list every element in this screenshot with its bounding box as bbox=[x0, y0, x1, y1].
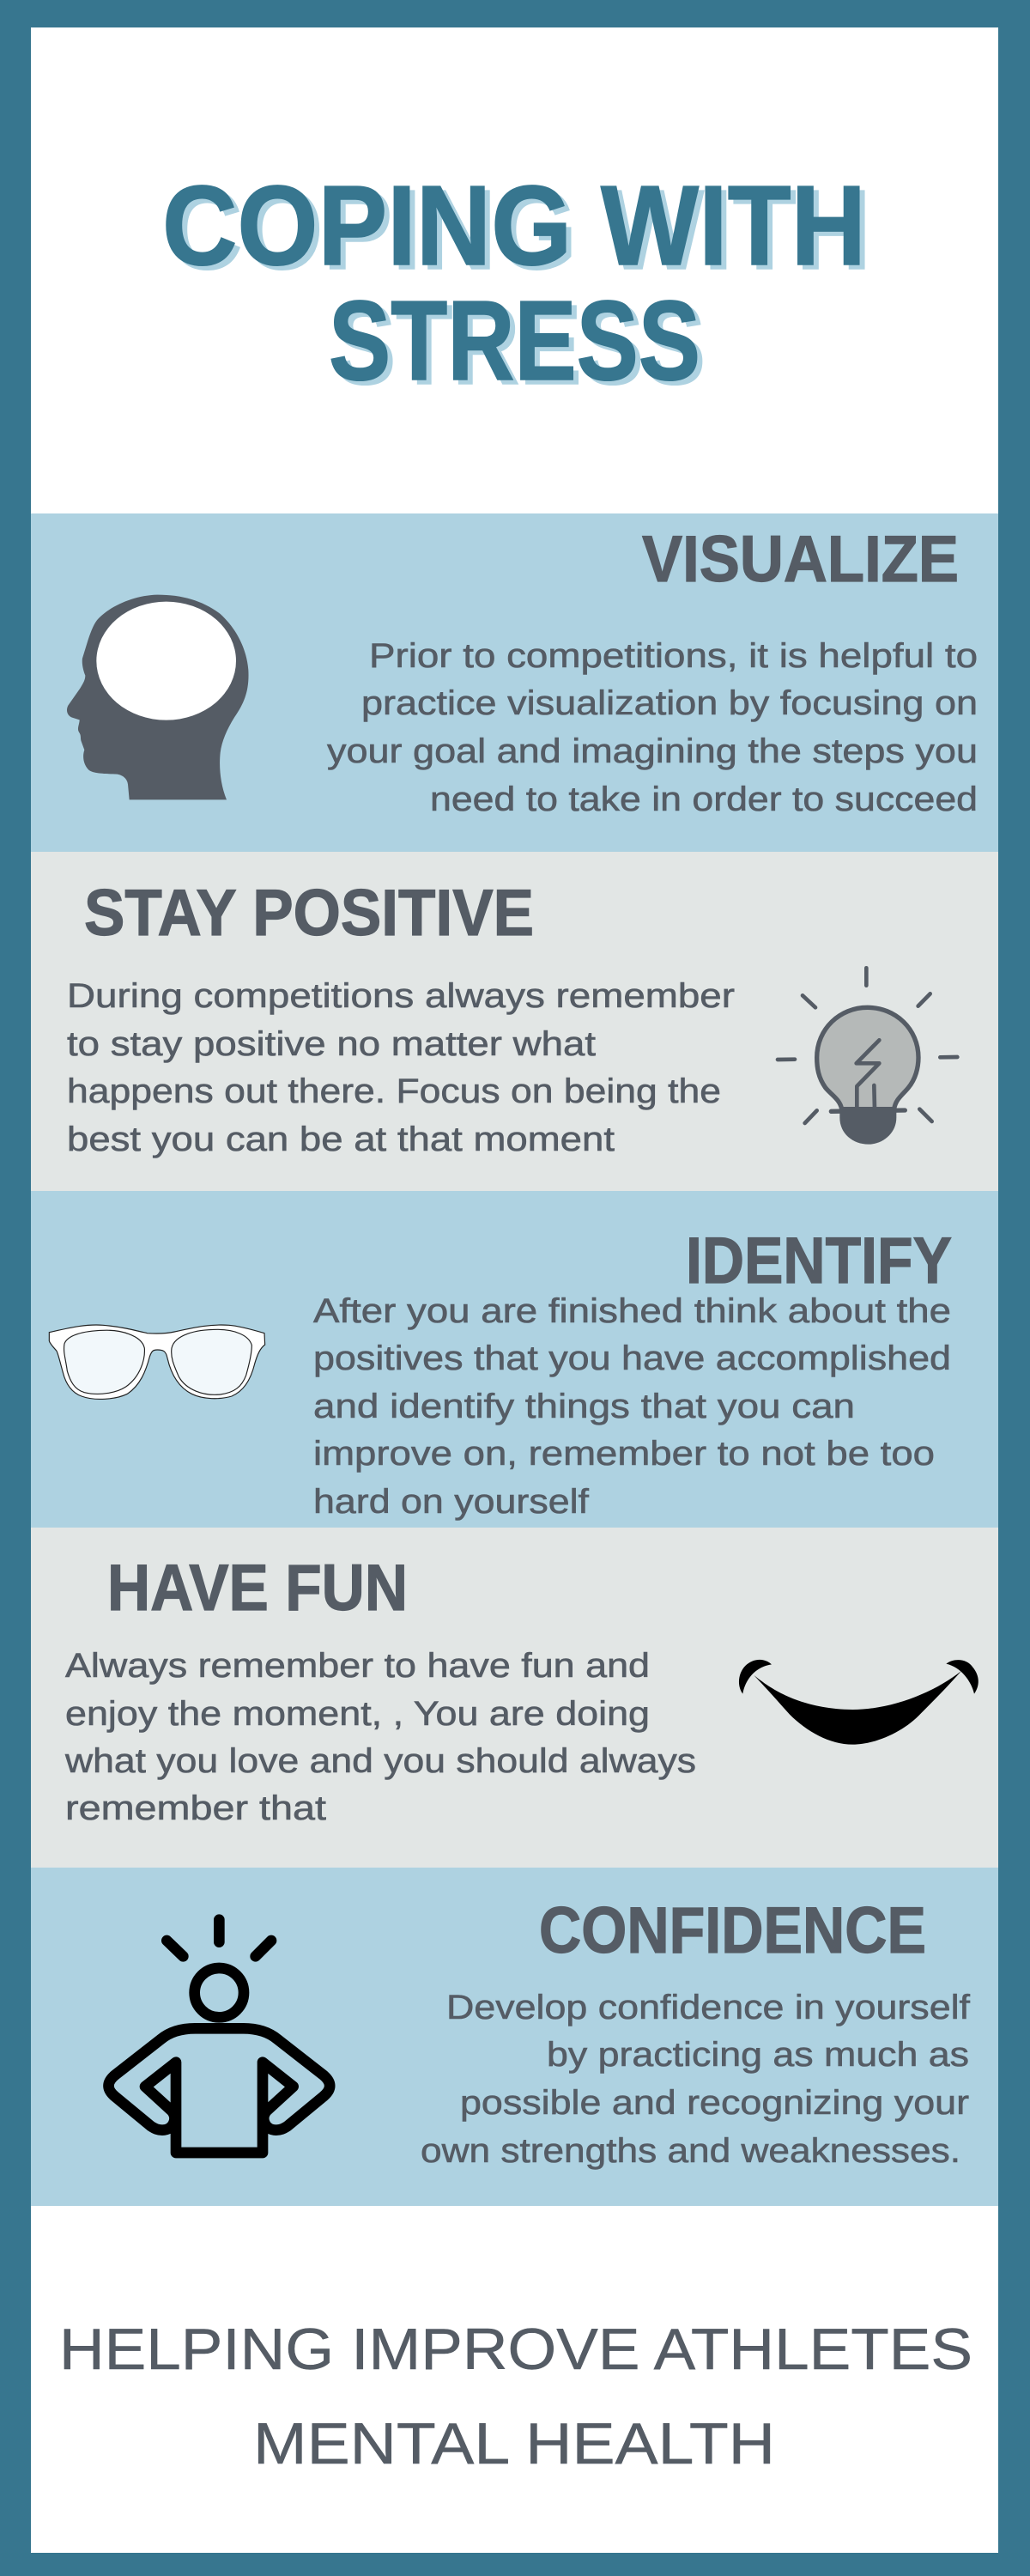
text: stay positive: best you can be at that moment bbox=[67, 1121, 615, 1158]
text: confidence bbox=[421, 1989, 971, 2170]
title shadow: COPING WITH bbox=[167, 167, 871, 293]
text: have fun bbox=[64, 1647, 696, 1827]
footer text: HELPING IMPROVE ATHLETES bbox=[59, 2317, 972, 2382]
title shadow bbox=[167, 167, 871, 408]
text: confidence: own strengths and weaknesses. bbox=[421, 2132, 960, 2170]
text: identify: positives that you have accomplished bbox=[313, 1340, 951, 1377]
text: stay positive: to stay positive no matter what bbox=[67, 1025, 596, 1063]
icon: light bulb bbox=[778, 968, 957, 1145]
title: COPING WITH bbox=[162, 162, 866, 289]
text: confidence: Develop confidence in yourself bbox=[446, 1989, 971, 2026]
text: identify: and identify things that you can bbox=[313, 1388, 855, 1425]
text: visualize: Prior to competitions, it is helpful to bbox=[369, 637, 978, 675]
text: identify bbox=[313, 1292, 951, 1521]
bulb base bbox=[839, 1110, 896, 1145]
footer text: MENTAL HEALTH bbox=[253, 2411, 775, 2476]
heading: visualize: VISUALIZE bbox=[642, 523, 959, 596]
panel: title area bbox=[31, 27, 998, 513]
icon: head silhouette bbox=[67, 595, 249, 799]
text: identify: improve on, remember to not be too bbox=[313, 1435, 935, 1473]
panel: identify bbox=[31, 1191, 998, 1528]
text: visualize: your goal and imagining the steps you bbox=[327, 732, 978, 770]
text: visualize bbox=[327, 637, 978, 818]
panel: have fun bbox=[31, 1528, 998, 1868]
panel: stay positive bbox=[31, 852, 998, 1191]
heading: confidence: CONFIDENCE bbox=[539, 1894, 926, 1967]
heading: stay positive: STAY POSITIVE bbox=[84, 877, 534, 950]
brain area bbox=[96, 602, 236, 720]
text: identify: hard on yourself bbox=[313, 1483, 590, 1521]
text: visualize: need to take in order to succeed bbox=[430, 781, 978, 818]
title shadow: STRESS bbox=[334, 282, 706, 408]
icon: confident person bbox=[108, 1920, 330, 2153]
text: visualize: practice visualization by focusing on bbox=[361, 684, 978, 722]
panel: footer bbox=[31, 2206, 998, 2553]
text: have fun: what you love and you should always bbox=[64, 1742, 696, 1780]
text: stay positive: happens out there. Focus on being the bbox=[67, 1072, 721, 1110]
text: identify: After you are finished think about the bbox=[313, 1292, 951, 1330]
heading: identify: IDENTIFY bbox=[686, 1224, 952, 1297]
panel: visualize bbox=[31, 513, 998, 852]
heading: have fun: HAVE FUN bbox=[107, 1552, 408, 1625]
title: STRESS bbox=[329, 277, 700, 404]
title bbox=[162, 162, 866, 404]
panel: confidence bbox=[31, 1868, 998, 2206]
icon: glasses bbox=[49, 1325, 265, 1399]
text: stay positive bbox=[67, 977, 735, 1158]
footer text bbox=[59, 2317, 972, 2476]
text: confidence: possible and recognizing your bbox=[460, 2084, 969, 2122]
text: have fun: enjoy the moment, , You are doing bbox=[65, 1695, 650, 1733]
text: stay positive: During competitions always remember bbox=[67, 977, 735, 1015]
text: confidence: by practicing as much as bbox=[547, 2036, 969, 2074]
icon: smile bbox=[739, 1660, 978, 1745]
text: have fun: remember that bbox=[65, 1789, 326, 1827]
text: have fun: Always remember to have fun and bbox=[65, 1647, 650, 1685]
